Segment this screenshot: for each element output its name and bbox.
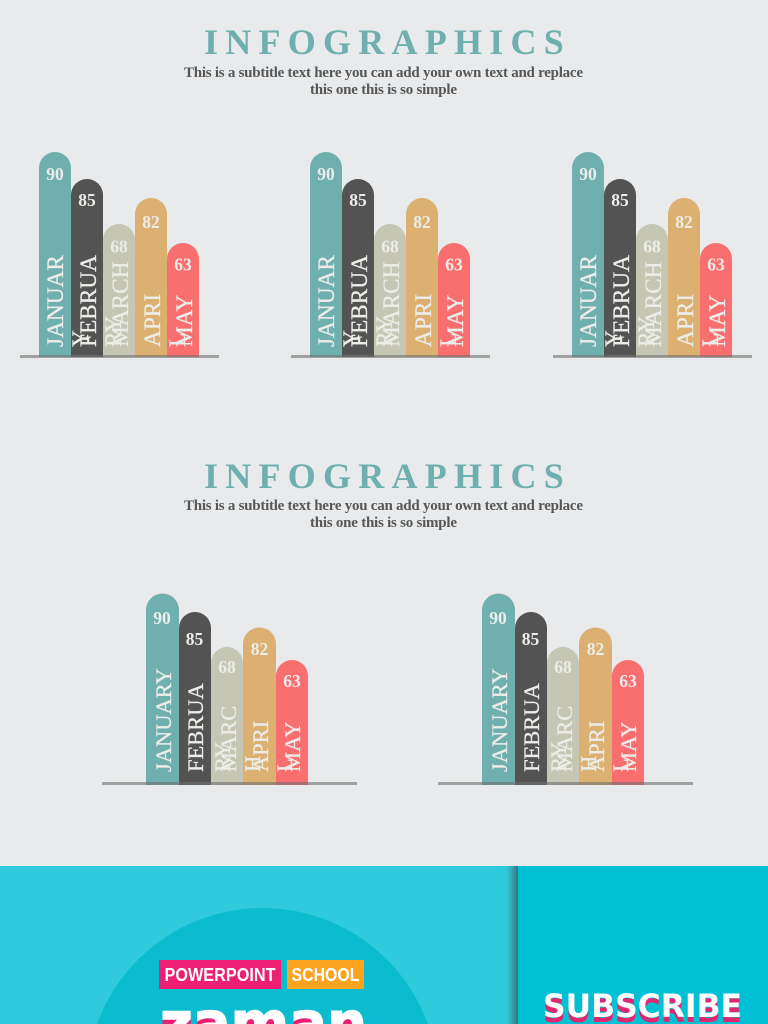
title: INFOGRAPHICS	[204, 22, 571, 62]
chart 5: 82	[587, 639, 604, 659]
chart 4: FEBRUA	[183, 682, 208, 772]
chart 4: 90	[153, 608, 171, 628]
chart 3: L	[698, 333, 724, 347]
chart 5: 63	[619, 671, 637, 691]
chart 2: JANUAR	[314, 255, 340, 347]
chart 2: MAY	[443, 295, 469, 347]
chart 1: 68	[110, 236, 128, 256]
chart 4: 82	[251, 639, 268, 659]
panel: logo banner	[0, 866, 518, 1024]
chart 3: MARCH	[641, 261, 667, 347]
chart 2: L	[436, 333, 462, 347]
chart 3	[553, 152, 752, 358]
chart 3: RY	[634, 316, 660, 347]
chart 3: 82	[675, 212, 693, 232]
chart 5: JANUARY	[487, 668, 512, 772]
chart 5: MAY	[616, 722, 641, 772]
chart 1: RY	[101, 316, 127, 347]
chart 2: RY	[372, 316, 398, 347]
heading block 1	[184, 22, 583, 98]
badge: school	[287, 960, 364, 989]
chart 2	[291, 152, 490, 358]
chart 1: 90	[46, 164, 64, 184]
chart 3: Y	[601, 330, 627, 347]
chart 5: RY	[546, 742, 571, 772]
chart 4: JANUARY	[151, 668, 176, 772]
chart 5: 90	[489, 608, 507, 628]
logo circle	[86, 908, 438, 1024]
chart 5: H	[576, 756, 601, 772]
chart 3: 63	[707, 254, 725, 274]
chart 1: MARCH	[108, 261, 134, 347]
chart 5: 85	[522, 629, 540, 649]
chart 2: MARCH	[379, 261, 405, 347]
badge: powerpoint	[159, 960, 281, 989]
chart 1: MAY	[172, 295, 198, 347]
chart 1: 63	[174, 254, 192, 274]
badge: powerpoint: POWERPOINT	[164, 965, 276, 985]
title: INFOGRAPHICS	[204, 456, 571, 496]
chart 2: Y	[339, 330, 365, 347]
chart 5: 68	[554, 657, 572, 677]
chart 3: 68	[643, 236, 661, 256]
chart 3: 85	[611, 190, 629, 210]
chart 4: MARC	[216, 706, 241, 772]
chart 4: MAY	[280, 722, 305, 772]
subtitle: this one this is so simple	[310, 515, 457, 531]
chart 2: 63	[445, 254, 463, 274]
chart 4: H	[240, 756, 265, 772]
chart 2: 82	[413, 212, 431, 232]
chart 1: JANUAR	[43, 255, 69, 347]
chart 4: APRI	[248, 721, 273, 772]
chart 4: 85	[186, 629, 204, 649]
chart 1: 85	[78, 190, 96, 210]
chart 3: APRI	[673, 294, 699, 347]
subtitle: this one this is so simple	[310, 82, 457, 98]
heading block 2	[184, 456, 583, 531]
chart 2: FEBRUA	[347, 255, 373, 347]
chart 1: APRI	[140, 294, 166, 347]
chart 4: RY	[210, 742, 235, 772]
chart 4: L	[272, 758, 297, 772]
chart 2: APRI	[411, 294, 437, 347]
chart 2: 68	[381, 236, 399, 256]
badge: school: SCHOOL	[292, 965, 360, 985]
chart 5: MARC	[552, 706, 577, 772]
chart 1: FEBRUA	[76, 255, 102, 347]
chart 3: JANUAR	[576, 255, 602, 347]
chart 1: 82	[142, 212, 160, 232]
chart 4: 68	[218, 657, 236, 677]
chart 3: MAY	[705, 295, 731, 347]
chart 5: L	[608, 758, 633, 772]
chart 2: 90	[317, 164, 335, 184]
panel: subscribe	[504, 866, 768, 1024]
chart 5: APRI	[584, 721, 609, 772]
chart 4	[102, 594, 357, 785]
chart 5	[438, 594, 693, 785]
chart 5: FEBRUA	[519, 682, 544, 772]
chart 1: Y	[68, 330, 94, 347]
subtitle: This is a subtitle text here you can add your own text and replace	[184, 65, 583, 81]
chart 4: 63	[283, 671, 301, 691]
chart 1	[20, 152, 219, 358]
subscribe text: SUBSCRIBE	[543, 987, 742, 1024]
logo wordmark	[162, 1010, 364, 1024]
chart 3: 90	[579, 164, 597, 184]
subtitle: This is a subtitle text here you can add your own text and replace	[184, 498, 583, 514]
chart 1: L	[165, 333, 191, 347]
chart 3: FEBRUA	[609, 255, 635, 347]
chart 2: 85	[349, 190, 367, 210]
